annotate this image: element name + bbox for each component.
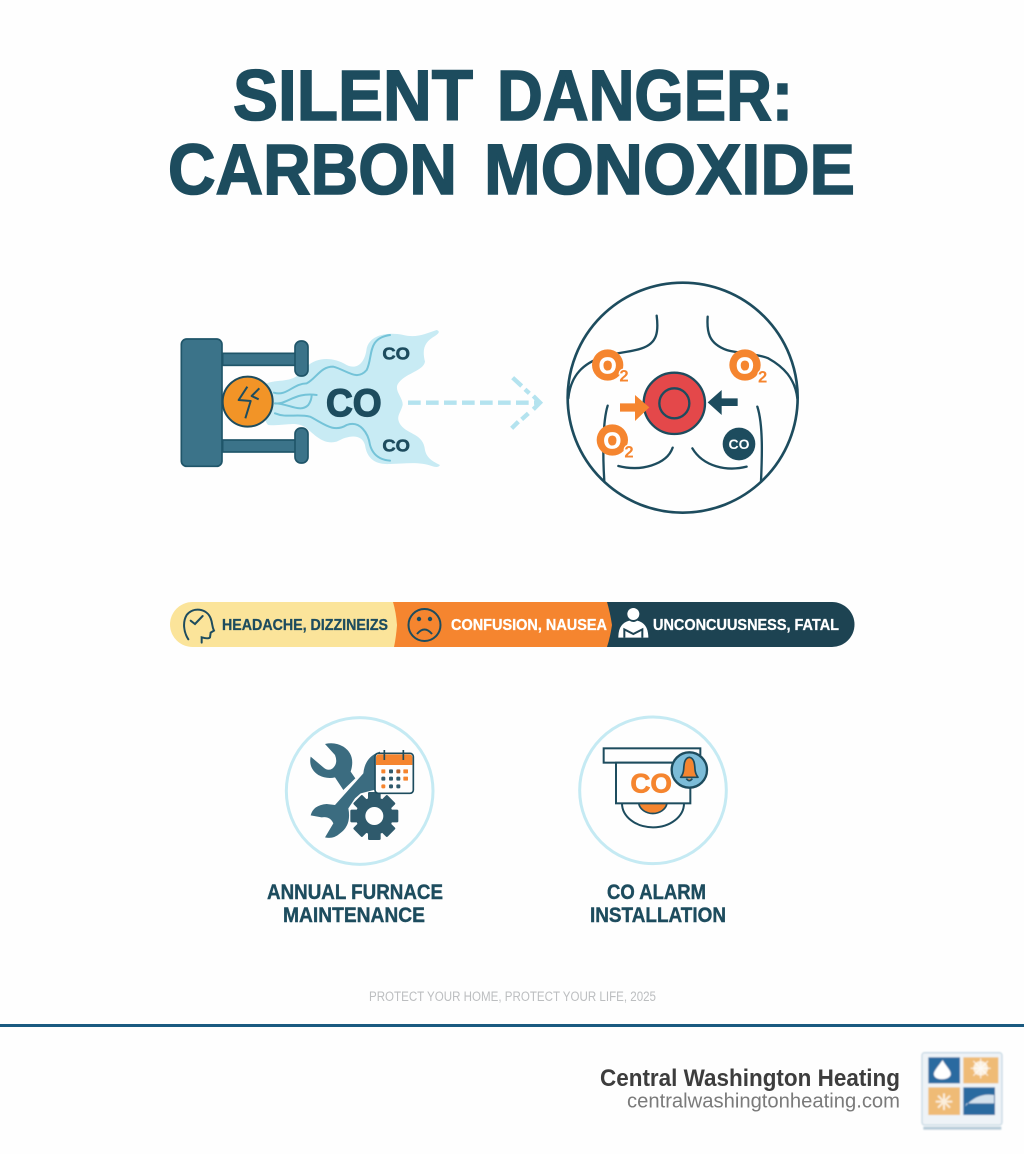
gear (350, 792, 398, 840)
CO labels (326, 343, 410, 456)
title (168, 57, 855, 210)
radiator body (181, 339, 308, 466)
label: annual furnace maintenance: MAINTENANCE (283, 904, 425, 927)
footer logo (922, 1053, 1002, 1130)
title: SILENT (233, 57, 473, 136)
wrench upper (310, 743, 355, 790)
label: CO alarm installation (590, 881, 726, 927)
illustration: body with oxygen and CO at the heart (568, 283, 798, 513)
orange arrow (620, 395, 649, 421)
icon: furnace maintenance tools (286, 718, 433, 864)
icon: person (618, 608, 648, 638)
O2 molecule left bottom: O (604, 427, 621, 453)
footer brand name: Central Washington Heating (600, 1065, 900, 1092)
title: MONOXIDE (484, 131, 855, 210)
icon: CO alarm (580, 717, 726, 864)
calendar (375, 750, 413, 793)
title: DANGER: (497, 57, 793, 136)
CO gas cloud (263, 330, 440, 467)
stage 2: orange: CONFUSION, NAUSEA (451, 617, 607, 634)
icon: sad face (408, 609, 440, 641)
label: annual furnace maintenance: ANNUAL FURNACE (267, 881, 443, 904)
O2 molecule left bottom (597, 424, 634, 461)
CO labels: CO (382, 343, 410, 363)
heart circle (644, 373, 705, 434)
dark arrow (708, 390, 738, 415)
label: CO alarm installation: CO ALARM (607, 881, 706, 904)
wrench lower (311, 752, 380, 838)
CO labels: CO (326, 382, 382, 425)
gas wisps (274, 335, 390, 461)
label: annual furnace maintenance (267, 881, 443, 927)
alarm mount plate (604, 748, 700, 763)
O2 molecule left bottom: 2 (624, 442, 634, 461)
stage 1: yellow: HEADACHE, DIZZINEIZS (222, 617, 388, 634)
alarm dome (622, 803, 684, 827)
burner flame circle (223, 377, 273, 427)
CO labels: CO (382, 436, 410, 456)
O2 molecule left top: O (599, 352, 616, 378)
alarm body (616, 763, 690, 803)
stage 1: yellow (170, 602, 397, 647)
torso outline (568, 316, 797, 482)
O2 molecule right top: 2 (758, 367, 767, 386)
symptom progression bar (170, 602, 855, 647)
CO molecule (723, 428, 755, 460)
bell badge (672, 752, 707, 788)
outer circle (568, 283, 798, 513)
stage 3: dark (600, 602, 855, 647)
O2 molecule right top: O (736, 352, 754, 378)
O2 molecule left top (592, 349, 629, 386)
label: CO alarm installation: INSTALLATION (590, 904, 726, 927)
illustration: furnace leaking CO (181, 330, 540, 467)
tagline: PROTECT YOUR HOME, PROTECT YOUR LIFE, 2025 (369, 989, 656, 1004)
CO molecule: CO (729, 436, 750, 452)
stage 2: orange (380, 602, 612, 647)
O2 molecule right top (729, 349, 767, 386)
title: CARBON (168, 131, 457, 210)
CO label: CO (630, 769, 672, 799)
dashed arrow (408, 378, 540, 428)
footer website: centralwashingtonheating.com (627, 1090, 900, 1112)
icon: head with check (184, 610, 214, 643)
stage 3: dark: UNCONCUUSNESS, FATAL (653, 617, 839, 634)
O2 molecule left top: 2 (619, 367, 629, 386)
